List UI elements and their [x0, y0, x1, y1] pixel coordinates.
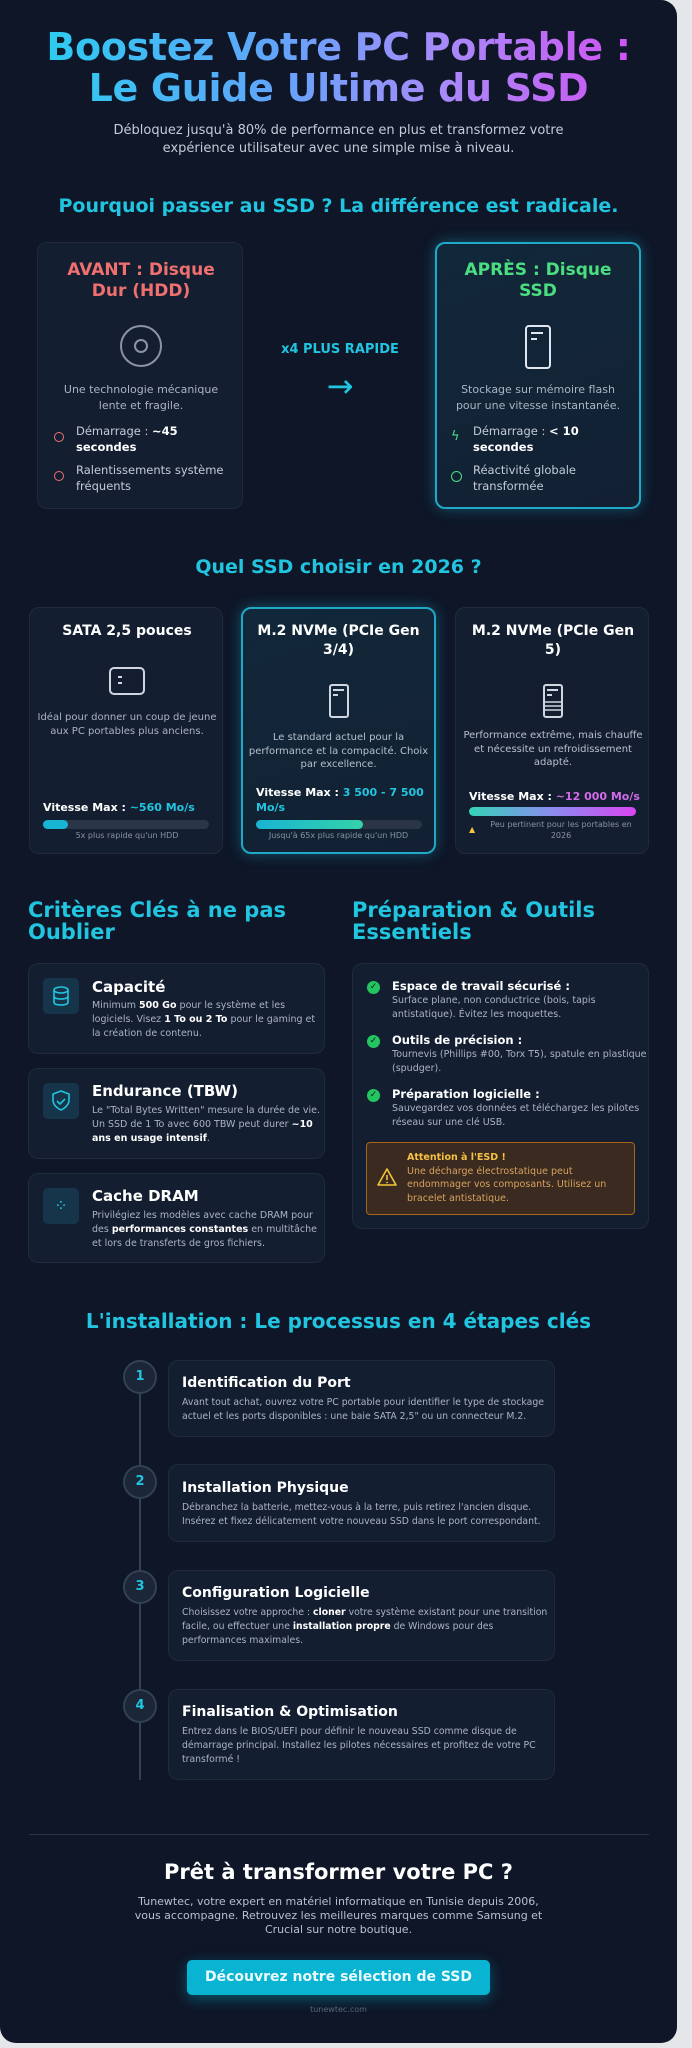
SSD bullets: ϟ [451, 429, 460, 444]
heading: preparation: Essentiels [352, 920, 472, 944]
Gen5 description: Performance extrême, mais chauffe [463, 730, 643, 741]
footer: tunewtec.com [310, 2005, 367, 2014]
SATA description: Idéal pour donner un coup de jeune [38, 712, 216, 723]
Gen4 caption: Jusqu'à 65x plus rapide qu'un HDD [269, 831, 408, 840]
Gen4 speed: Vitesse Max : 3 500 - 7 500 [256, 786, 424, 799]
step 2: Installation Physique [182, 1480, 349, 1496]
item: espace [367, 979, 596, 1020]
Gen5 bar [469, 807, 636, 816]
HDD description: Une technologie mécanique [64, 383, 218, 396]
SSD title: APRÈS : Disque [464, 260, 612, 280]
heading: installation: L'installation : Le processus en 4 étapes clés [86, 1309, 591, 1333]
callout: ESD warning: endommager vos composants. Utilisez un [407, 1179, 606, 1190]
Gen5 description: et nécessite un refroidissement [474, 744, 632, 754]
HDD title [67, 260, 215, 301]
heading: pourquoi: Pourquoi passer au SSD ? La différence est radicale. [58, 195, 618, 217]
endurance text: Endurance (TBW) [92, 1082, 238, 1100]
step 1 [123, 1360, 555, 1437]
step 2: Insérez et fixez délicatement votre nouveau SSD dans le port correspondant. [182, 1516, 541, 1527]
step 1: Identification du Port [182, 1375, 351, 1391]
capacite text: logiciels. Visez 1 To ou 2 To pour le gaming et [92, 1014, 315, 1025]
panel: HDD before [37, 242, 243, 509]
Gen5 title: M.2 NVMe (PCIe Gen [472, 623, 634, 639]
Gen4 title: 3/4) [323, 642, 354, 658]
heading: preparation [352, 898, 595, 944]
SSD bullets: Démarrage : < 10 [473, 424, 579, 438]
item: espace: Espace de travail sécurisé : [392, 979, 570, 993]
Gen4 description: par excellence. [300, 759, 376, 770]
Gen5 caption: Peu pertinent pour les portables en [490, 820, 632, 829]
item: outils: (spudger). [392, 1062, 441, 1074]
Gen4 speed: Mo/s [256, 801, 285, 814]
step 3: Configuration Logicielle [182, 1585, 370, 1601]
capacite text: Capacité [92, 978, 165, 996]
Gen5 title [472, 623, 634, 658]
step 4: Finalisation & Optimisation [182, 1704, 398, 1720]
step 3: Choisissez votre approche : cloner votre système existant pour une transition [182, 1607, 547, 1618]
item: logiciel [367, 1087, 639, 1128]
SSD description: pour une vitesse instantanée. [456, 399, 620, 412]
endurance text: Le "Total Bytes Written" mesure la durée de vie. [92, 1105, 320, 1116]
panel: SATA [29, 607, 223, 854]
Gen5 title: 5) [545, 642, 561, 658]
Gen4 bar [256, 820, 422, 829]
Gen5 caption: 2026 [551, 831, 571, 840]
HDD description: lente et fragile. [99, 399, 183, 412]
Gen5 speed: Vitesse Max : ~12 000 Mo/s [469, 790, 640, 803]
SATA bar [43, 820, 209, 829]
Gen4 description [249, 732, 428, 770]
SSD bullets: transformée [473, 479, 544, 493]
step 1: actuel et les ports disponibles : une baie SATA 2,5" ou un connecteur M.2. [182, 1411, 526, 1422]
SSD bullets [451, 424, 579, 493]
step 3: facile, ou effectuer une installation propre de Windows pour des [182, 1621, 493, 1632]
step 4: 4 [135, 1698, 145, 1713]
item: outils: Outils de précision : [392, 1033, 522, 1047]
SSD title [464, 259, 612, 301]
HDD title: Dur (HDD) [92, 281, 190, 301]
icon: loader [43, 1188, 79, 1224]
capacite text [92, 978, 315, 1039]
item: logiciel: Préparation logicielle : [392, 1087, 540, 1101]
HDD bullets: secondes [76, 440, 136, 454]
SSD description [456, 383, 620, 412]
panel: NVMe Gen 3/4 [241, 607, 436, 854]
cache text: Privilégiez les modèles avec cache DRAM pour [92, 1210, 313, 1221]
HDD bullets [54, 424, 223, 493]
capacite text: Minimum 500 Go pour le système et les [92, 1000, 285, 1011]
card: endurance [28, 1068, 325, 1159]
step 1: 1 [135, 1369, 145, 1384]
step 1: Avant tout achat, ouvrez votre PC portable pour identifier le type de stockage [182, 1397, 544, 1408]
step 2: Débranchez la batterie, mettez-vous à la terre, puis retirez l'ancien disque. [182, 1502, 531, 1513]
SATA speed: Vitesse Max : ~560 Mo/s [43, 801, 195, 814]
subtitle [114, 123, 563, 156]
HDD bullets: Ralentissements système [76, 463, 223, 477]
item: logiciel: ✓ [370, 1090, 377, 1100]
icon: ssd [525, 325, 551, 369]
icon: loader: ⁘ [54, 1196, 68, 1215]
arrow: x4 faster: → [327, 367, 353, 405]
card: capacite [28, 963, 325, 1054]
timeline: steps [123, 1360, 555, 1780]
cache text: Cache DRAM [92, 1187, 199, 1205]
heading: preparation: Préparation & Outils [352, 898, 595, 922]
icon: gen5 drive [543, 684, 563, 718]
SATA description: aux PC portables plus anciens. [50, 726, 204, 737]
heading: quel SSD: Quel SSD choisir en 2026 ? [195, 556, 482, 578]
Gen4 title [257, 623, 420, 658]
Gen4 title: M.2 NVMe (PCIe Gen [257, 623, 420, 639]
SSD description: Stockage sur mémoire flash [461, 383, 615, 396]
panel: NVMe Gen 5 [455, 607, 649, 854]
Gen5 caption: ▲ [469, 825, 475, 834]
HDD description [64, 383, 218, 412]
panel: preparation [352, 963, 649, 1229]
step 3 [123, 1570, 555, 1661]
Gen5 caption [469, 820, 632, 840]
HDD bullets: Démarrage : ~45 [76, 424, 178, 438]
item: logiciel: réseau sur une clé USB. [392, 1116, 505, 1128]
panel: SSD after [435, 242, 641, 509]
item: outils: Tournevis (Phillips #00, Torx T5), spatule en plastique [392, 1049, 646, 1060]
step 4: transformé ! [182, 1754, 240, 1765]
callout: ESD warning: bracelet antistatique. [407, 1192, 509, 1204]
subtitle: expérience utilisateur avec une simple mise à niveau. [163, 141, 514, 156]
arrow: x4 faster: x4 PLUS RAPIDE [281, 342, 399, 357]
button [187, 1960, 490, 1995]
subtitle: Débloquez jusqu'à 80% de performance en plus et transformez votre [114, 123, 563, 138]
endurance text [92, 1082, 320, 1144]
Gen4 speed [256, 786, 424, 814]
SSD bullets: secondes [473, 440, 533, 454]
title: Le Guide Ultime du SSD [89, 66, 588, 110]
cache text [92, 1187, 317, 1249]
item: espace: Surface plane, non conductrice (bois, tapis [392, 995, 596, 1006]
CTA text: Crucial sur notre boutique. [265, 1923, 412, 1936]
step 3: performances maximales. [182, 1635, 303, 1646]
SATA caption: 5x plus rapide qu'un HDD [76, 831, 178, 840]
card: cache DRAM [28, 1173, 325, 1263]
SSD title: SSD [519, 281, 557, 301]
Gen4 description: Le standard actuel pour la [273, 732, 404, 743]
endurance text: Un SSD de 1 To avec 600 TBW peut durer ~10 [92, 1119, 313, 1130]
item: espace: antistatique). Évitez les moquettes. [392, 1008, 561, 1020]
heading: criteres: Oublier [28, 920, 115, 944]
item: logiciel: Sauvegardez vos données et téléchargez les pilotes [392, 1103, 639, 1114]
HDD title: AVANT : Disque [67, 260, 215, 280]
CTA text: vous accompagne. Retrouvez les meilleures marques comme Samsung et [135, 1909, 542, 1922]
title [0, 27, 677, 109]
callout: ESD warning [366, 1142, 635, 1215]
heading: criteres [28, 898, 286, 944]
icon: warning [377, 1168, 397, 1186]
capacite text: la création de contenu. [92, 1028, 202, 1039]
icon: hard disk [120, 325, 162, 367]
CTA text [135, 1895, 542, 1936]
step 4 [123, 1689, 555, 1780]
arrow: x4 faster [281, 342, 399, 405]
title: Boostez Votre PC Portable : [46, 25, 631, 69]
Gen4 description: performance et la compacité. Choix [249, 746, 428, 756]
icon: shield [43, 1083, 79, 1119]
step 4: démarrage principal. Installez les pilotes nécessaires et profitez de votre PC [182, 1740, 536, 1751]
heading: criteres: Critères Clés à ne pas [28, 898, 286, 922]
icon: database [43, 978, 79, 1014]
item: espace: ✓ [370, 982, 377, 992]
step 3: 3 [135, 1579, 145, 1594]
callout: ESD warning: Attention à l'ESD ! [407, 1152, 506, 1163]
item: outils: ✓ [370, 1036, 377, 1046]
step 2 [123, 1464, 555, 1542]
cache text: et lors de transferts de gros fichiers. [92, 1238, 265, 1249]
heading: CTA: Prêt à transformer votre PC ? [164, 1860, 513, 1884]
HDD bullets: fréquents [76, 479, 131, 493]
step 2: 2 [135, 1474, 145, 1489]
SSD bullets: Réactivité globale [473, 463, 576, 477]
step 4: Entrez dans le BIOS/UEFI pour définir le nouveau SSD comme disque de [182, 1726, 517, 1737]
Gen5 description [463, 730, 643, 768]
item: outils [367, 1033, 646, 1074]
icon: SATA drive [109, 667, 145, 695]
cache text: des performances constantes en multitâche [92, 1224, 317, 1235]
button: Découvrez notre sélection de SSD [205, 1969, 472, 1985]
icon: m2 drive [329, 684, 349, 718]
SATA title: SATA 2,5 pouces [62, 623, 192, 639]
endurance text: ans en usage intensif. [92, 1133, 210, 1144]
CTA text: Tunewtec, votre expert en matériel informatique en Tunisie depuis 2006, [138, 1895, 539, 1908]
Gen5 description: adapté. [534, 757, 572, 768]
callout: ESD warning: Une décharge électrostatique peut [407, 1166, 573, 1176]
SATA description [38, 712, 216, 737]
